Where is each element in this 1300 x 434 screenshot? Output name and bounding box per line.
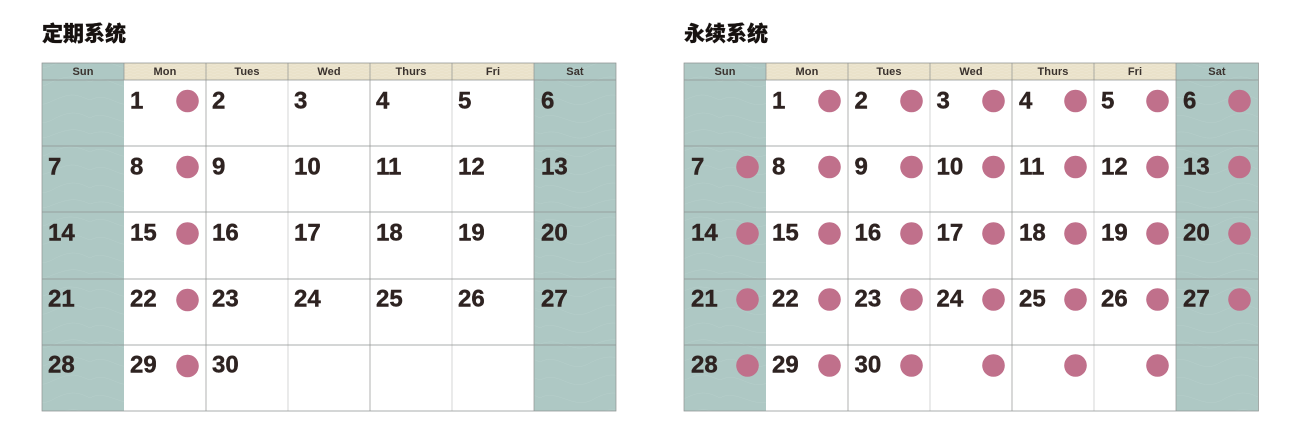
date numbers: 29 xyxy=(130,352,157,378)
date numbers: 13 xyxy=(541,154,568,180)
weekday labels xyxy=(72,66,584,78)
date numbers: 22 xyxy=(772,286,799,312)
date numbers: 12 xyxy=(1101,154,1128,180)
date numbers: 18 xyxy=(1019,220,1046,246)
date numbers: 10 xyxy=(936,154,963,180)
date numbers: 30 xyxy=(212,352,239,378)
panel: periodic system calendar xyxy=(42,63,616,411)
weekday labels: Mon xyxy=(154,66,177,78)
date numbers: 13 xyxy=(1183,154,1210,180)
date numbers: 21 xyxy=(48,286,75,312)
date numbers: 23 xyxy=(854,286,881,312)
date numbers: 4 xyxy=(1019,88,1033,114)
date numbers: 3 xyxy=(294,88,307,114)
weekday labels: Sun xyxy=(72,66,94,78)
weekend column: Saturday xyxy=(1176,63,1258,411)
weekday labels xyxy=(714,66,1226,78)
weekend column: Sunday xyxy=(42,63,124,411)
weekday labels: Tues xyxy=(234,66,260,78)
weekday header band xyxy=(124,63,534,80)
date numbers: 26 xyxy=(458,286,485,312)
date numbers xyxy=(691,88,1210,378)
date numbers: 17 xyxy=(294,220,321,246)
date numbers: 18 xyxy=(376,220,403,246)
date numbers: 22 xyxy=(130,286,157,312)
weekday labels: Mon xyxy=(796,66,819,78)
date numbers: 6 xyxy=(541,88,554,114)
weekday labels: Thurs xyxy=(395,66,427,78)
date numbers: 7 xyxy=(48,154,61,180)
title: 永续系统: 永续系统 xyxy=(684,22,768,46)
date numbers: 9 xyxy=(854,154,868,180)
date numbers: 6 xyxy=(1183,88,1196,114)
date numbers: 19 xyxy=(1101,220,1128,246)
date numbers: 21 xyxy=(691,286,718,312)
date numbers: 2 xyxy=(854,88,868,114)
date numbers: 9 xyxy=(212,154,225,180)
date numbers: 15 xyxy=(772,220,799,246)
date numbers xyxy=(48,88,568,378)
date numbers: 11 xyxy=(376,154,401,180)
date numbers: 27 xyxy=(1183,286,1210,312)
date numbers: 11 xyxy=(1019,154,1044,180)
date numbers: 24 xyxy=(936,286,964,312)
date numbers: 2 xyxy=(212,88,225,114)
date numbers: 7 xyxy=(691,154,704,180)
date numbers: 14 xyxy=(48,220,75,246)
dose dots: Mondays only xyxy=(176,90,199,377)
date numbers: 5 xyxy=(1101,88,1114,114)
date numbers: 14 xyxy=(691,220,718,246)
date numbers: 12 xyxy=(458,154,485,180)
weekday labels: Sat xyxy=(1208,66,1226,78)
weekday labels: Wed xyxy=(959,66,983,78)
date numbers: 24 xyxy=(294,286,321,312)
weekend column: Sunday xyxy=(684,63,766,411)
weekday labels: Sun xyxy=(714,66,736,78)
weekday header band xyxy=(766,63,1176,80)
date numbers: 8 xyxy=(130,154,143,180)
date numbers: 29 xyxy=(772,352,799,378)
date numbers: 1 xyxy=(130,88,143,114)
date numbers: 20 xyxy=(541,220,568,246)
weekday labels: Tues xyxy=(876,66,902,78)
title: 定期系统: 定期系统 xyxy=(42,22,126,46)
date numbers: 15 xyxy=(130,220,157,246)
date numbers: 28 xyxy=(691,352,718,378)
date numbers: 30 xyxy=(854,352,881,378)
weekday labels: Fri xyxy=(486,66,500,78)
weekday labels: Wed xyxy=(317,66,341,78)
date numbers: 16 xyxy=(854,220,881,246)
weekend column: Saturday xyxy=(534,63,616,411)
date numbers: 19 xyxy=(458,220,485,246)
weekday labels: Fri xyxy=(1128,66,1142,78)
date numbers: 25 xyxy=(376,286,403,312)
weekday labels: Sat xyxy=(566,66,584,78)
date numbers: 4 xyxy=(376,88,390,114)
date numbers: 27 xyxy=(541,286,568,312)
date numbers: 3 xyxy=(936,88,950,114)
dose dots: every day xyxy=(736,90,1251,377)
date numbers: 25 xyxy=(1019,286,1046,312)
date numbers: 1 xyxy=(772,88,785,114)
date numbers: 20 xyxy=(1183,220,1210,246)
date numbers: 23 xyxy=(212,286,239,312)
date numbers: 16 xyxy=(212,220,239,246)
weekday labels: Thurs xyxy=(1037,66,1069,78)
date numbers: 26 xyxy=(1101,286,1128,312)
panel: continuous system calendar xyxy=(684,63,1258,411)
date numbers: 17 xyxy=(936,220,963,246)
date numbers: 10 xyxy=(294,154,321,180)
date numbers: 5 xyxy=(458,88,471,114)
date numbers: 28 xyxy=(48,352,75,378)
date numbers: 8 xyxy=(772,154,785,180)
